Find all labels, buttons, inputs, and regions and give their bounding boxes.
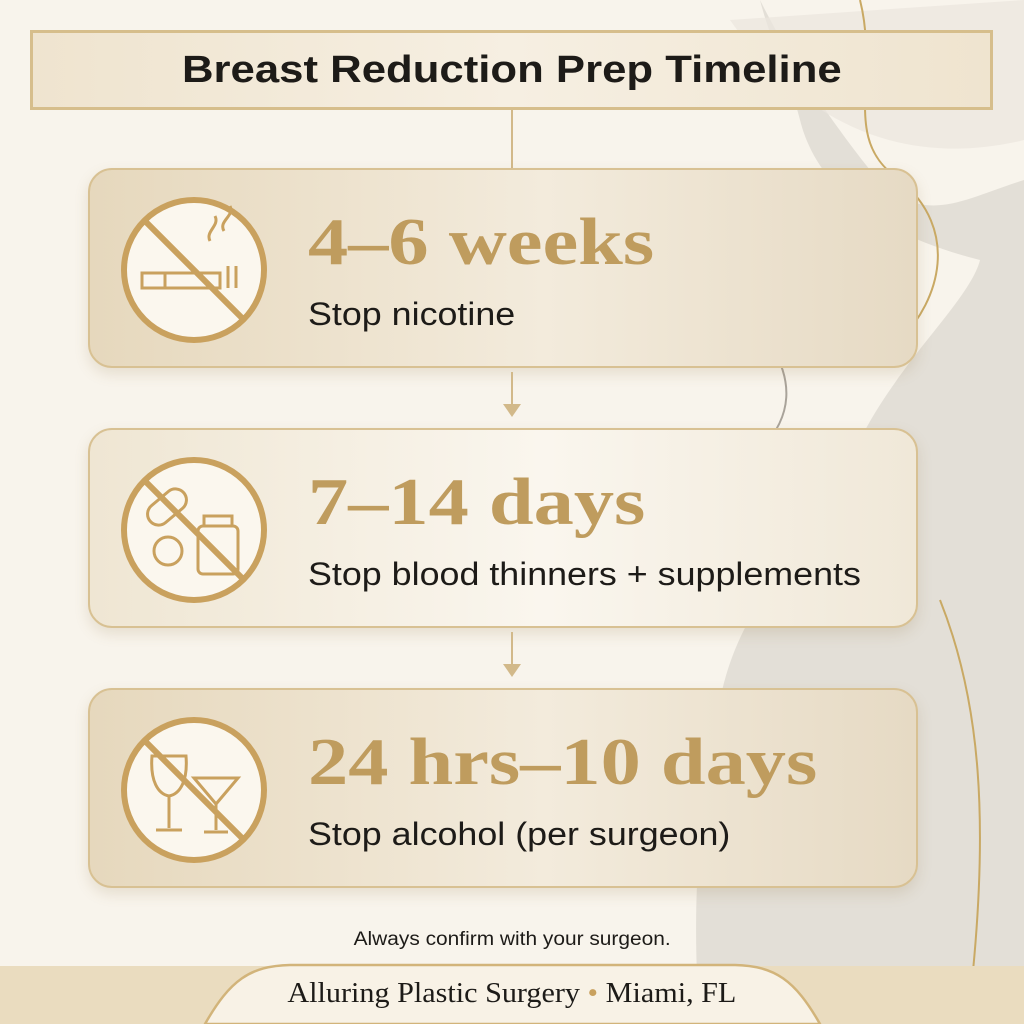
card: 24 hrs-10 days <box>88 688 918 888</box>
title <box>30 30 993 110</box>
title: Breast Reduction Prep Timeline <box>182 48 841 90</box>
footer band <box>0 964 1024 1024</box>
card: 4-6 weeks: Stop nicotine <box>308 296 515 332</box>
card: 24 hrs-10 days: Stop alcohol (per surgeon) <box>308 816 730 852</box>
footer text: Alluring Plastic Surgery • Miami, FL <box>288 977 736 1009</box>
card: 7-14 days: Stop blood thinners + supplements <box>308 556 861 592</box>
card: 7-14 days <box>88 428 918 628</box>
icon: no smoking <box>121 197 267 343</box>
arrow 2 <box>503 632 521 677</box>
card: 4-6 weeks <box>88 168 918 368</box>
icon: no alcohol <box>121 717 267 863</box>
arrow 1 <box>503 372 521 417</box>
card: 4-6 weeks: 4–6 weeks <box>308 205 654 279</box>
footnote: Always confirm with your surgeon. <box>353 929 671 950</box>
connector line <box>511 110 513 170</box>
card: 7-14 days: 7–14 days <box>308 465 645 539</box>
icon: no pills <box>121 457 267 603</box>
card: 24 hrs-10 days: 24 hrs–10 days <box>308 725 817 799</box>
